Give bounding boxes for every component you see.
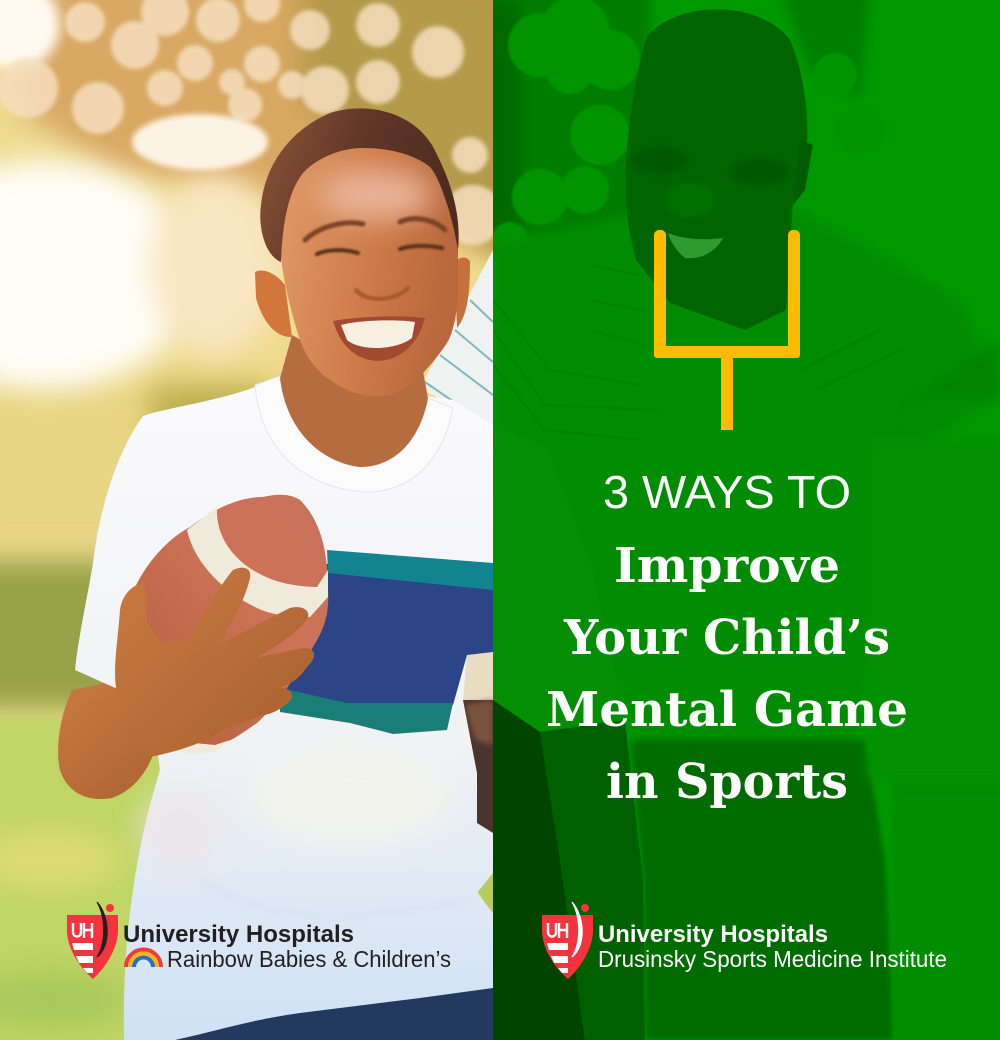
icon: rainbow (126, 950, 161, 967)
title line: improve: Improve (614, 538, 840, 594)
boy: ears (255, 258, 470, 337)
icon: UH shield (67, 902, 118, 979)
ear (793, 140, 813, 205)
dark background gap (493, 700, 585, 1040)
title line: your child's: Your Child’s (563, 610, 890, 666)
nose highlight (667, 184, 713, 216)
brows and eyes (634, 148, 788, 184)
shirt area (493, 210, 1000, 740)
left photo panel: boy running with football (0, 0, 520, 1040)
shirt collar (255, 375, 453, 492)
boy: upper arm and elbow (58, 683, 152, 799)
boy: hair (260, 108, 459, 262)
logo: UH Rainbow Babies & Children's (67, 902, 451, 979)
logo text: Rainbow Babies & Children's: Rainbow Babies & Children’s (167, 946, 451, 972)
dark foliage (480, 0, 885, 258)
boy: smile (333, 316, 425, 361)
boy: hand gripping ball (115, 568, 314, 757)
head (625, 9, 807, 330)
title line: mental game: Mental Game (546, 682, 908, 738)
shorts (630, 740, 895, 1040)
logo: UH Drusinsky Sports Medicine Institute (542, 902, 947, 979)
teeth (668, 233, 723, 258)
icon: UH shield (542, 902, 593, 979)
darkened photo of boy and background (480, 0, 1000, 1040)
right green panel (480, 0, 1000, 1040)
boy: eyes and brows (305, 219, 445, 299)
logo text: University Hospitals: University Hospitals (598, 921, 828, 948)
shirt blue stripe (280, 560, 493, 705)
photo background: sunlit trees and grass (0, 0, 520, 1040)
title line: 3 ways to: 3 WAYS TO (603, 466, 851, 518)
shirt teal lower stripe (280, 688, 453, 734)
title (546, 466, 908, 810)
shirt stripes (493, 265, 900, 440)
logo text: institute name: Drusinsky Sports Medicine Institute (598, 946, 947, 972)
icon: football goalpost (654, 230, 800, 430)
football white band (187, 507, 328, 617)
arm (540, 720, 645, 1040)
title line: in sports: in Sports (606, 754, 848, 810)
second player shirt behind boy (420, 250, 493, 915)
boy: white t-shirt (75, 375, 493, 1040)
boy: face (281, 148, 458, 396)
lower right (892, 760, 1000, 1040)
boy: neck (280, 335, 428, 467)
shirt teal upper stripe (327, 550, 493, 590)
sleeve of boy (493, 425, 625, 732)
logo text: University Hospitals: University Hospitals (123, 921, 354, 948)
jeans (175, 988, 493, 1040)
football (128, 495, 328, 754)
